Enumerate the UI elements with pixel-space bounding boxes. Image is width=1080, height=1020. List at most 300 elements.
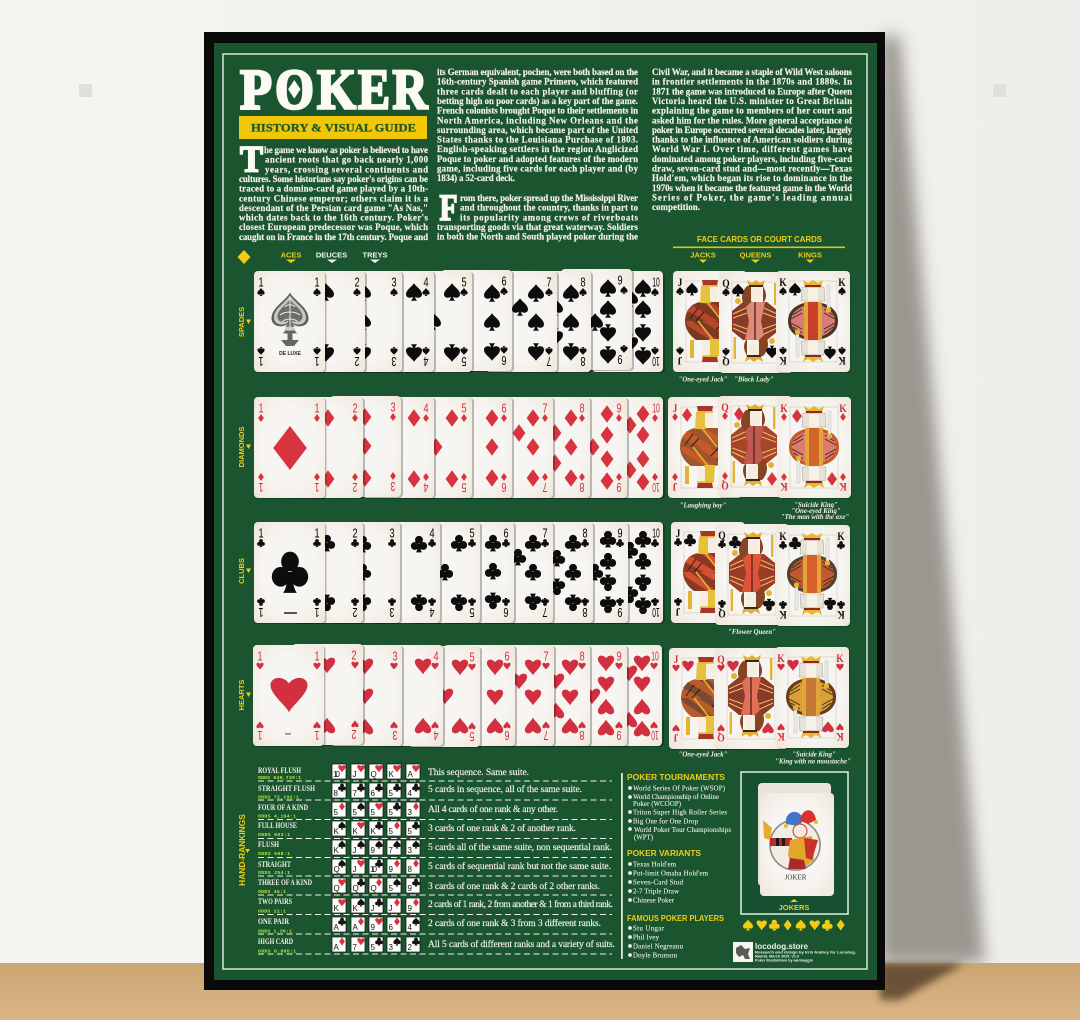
card: five of clubs xyxy=(409,522,482,624)
hand: one pair cards: 6 xyxy=(388,923,394,932)
history text column 3: dominated among poker players, including five-card xyxy=(652,154,852,164)
hand odds: ODDS 1.36:1 xyxy=(258,928,292,934)
history text column 2: 1834) a 52-card deck. xyxy=(437,173,515,183)
card: queen of spades xyxy=(719,272,794,374)
hand: straight cards: J xyxy=(352,865,356,874)
card: king of diamonds xyxy=(777,397,852,499)
card: three of hearts: 3 xyxy=(392,728,398,741)
face cards: diamonds xyxy=(668,396,852,499)
card: three of spades: 3 xyxy=(391,354,397,367)
card: eight of hearts xyxy=(519,645,592,747)
credits: Poker illustrations by warmaggin xyxy=(755,958,813,962)
hand: two pairs cards xyxy=(332,898,420,913)
credits: locodog.store xyxy=(755,941,808,951)
card: eight of spades: 8 xyxy=(580,354,586,367)
hand descriptions: All 5 cards of different ranks and a variety of suits. xyxy=(428,939,615,950)
watermark right xyxy=(993,84,1006,97)
card: three of clubs xyxy=(329,522,402,624)
hand: three of a kind cards: Q xyxy=(334,884,340,893)
card: king of clubs: K xyxy=(837,530,845,543)
row label: diamonds: DIAMONDS xyxy=(237,427,246,467)
card: four of diamonds xyxy=(363,397,436,499)
history text column 3: explaining the game to members of her court and xyxy=(652,106,852,116)
hand: full house cards: K xyxy=(370,827,376,836)
card: five of spades: 5 xyxy=(461,276,467,290)
card: king of spades: K xyxy=(779,276,787,289)
card: king of spades xyxy=(776,271,851,373)
card: ten of hearts: 10 xyxy=(651,727,659,741)
card: ace of spades: 1 xyxy=(258,354,264,367)
card: ace of clubs: 1 xyxy=(258,527,264,541)
hand descriptions: 5 cards all of the same suite, non sequential rank. xyxy=(428,842,612,853)
card: king of clubs xyxy=(776,525,851,627)
card: jack of spades: J xyxy=(677,354,682,367)
row: spades number cards xyxy=(254,269,665,373)
hand names: ONE PAIR xyxy=(258,917,289,926)
row label: spades: SPADES xyxy=(237,307,246,337)
panel: poker tournaments: (WPT) xyxy=(634,834,653,842)
card: two of clubs xyxy=(292,522,365,624)
history text column 3: competition. xyxy=(652,202,700,212)
hand descriptions: 2 cards of 1 rank, 2 from another & 1 from a third rank. xyxy=(428,899,613,910)
card: seven of spades: 7 xyxy=(546,354,552,367)
card: ten of hearts: 10 xyxy=(651,650,659,664)
card: king of diamonds: K xyxy=(780,480,788,493)
hand names: TWO PAIRS xyxy=(258,897,292,906)
row label: clubs xyxy=(237,558,251,584)
card: queen of spades: Q xyxy=(722,355,730,368)
card: six of clubs xyxy=(443,522,516,624)
card: five of spades: 5 xyxy=(461,354,467,367)
wooden floor xyxy=(0,963,1080,1020)
hand: royal flush cards xyxy=(332,764,420,779)
history text column 3: Hold'em, which began its rise to dominance in the xyxy=(652,173,852,183)
caption: king of hearts nicknames xyxy=(775,752,851,766)
caption: king of hearts nicknames: "King with no moustache" xyxy=(775,758,851,766)
card: six of diamonds: 6 xyxy=(501,402,507,416)
card: queen of clubs xyxy=(715,524,790,626)
card: three of diamonds: 3 xyxy=(390,479,396,492)
hand: straight flush cards: 6 xyxy=(370,789,376,798)
hand: two pairs cards: J xyxy=(370,904,374,913)
card: ace of diamonds: 1 xyxy=(258,480,264,493)
history text column 2: French colonists brought Poque to their settlements in xyxy=(437,106,638,116)
title: P xyxy=(240,58,272,122)
card: six of hearts xyxy=(444,645,517,747)
hand: full house cards: K xyxy=(352,827,358,836)
card: jack of clubs: J xyxy=(676,527,681,540)
hand: straight cards: 8 xyxy=(408,865,412,874)
history text column 1 xyxy=(239,145,429,242)
card: jack of spades: J xyxy=(678,276,683,289)
card: four of hearts: 4 xyxy=(433,728,439,741)
hand: four of a kind cards: 5 xyxy=(388,808,394,817)
card: nine of clubs: 9 xyxy=(617,605,623,618)
panel: poker variants: Pot-limit Omaha Hold'em xyxy=(633,870,709,878)
row: diamonds number cards xyxy=(254,396,665,499)
card: king of hearts: K xyxy=(777,730,785,743)
card: four of diamonds: 4 xyxy=(423,402,429,416)
hand: one pair cards: A xyxy=(352,923,358,932)
hand: high card cards: 5 xyxy=(370,943,376,952)
card: eight of diamonds: 8 xyxy=(579,402,585,416)
card: eight of hearts: 8 xyxy=(579,650,585,664)
row: clubs number cards xyxy=(254,522,665,624)
card: ace of diamonds: 1 xyxy=(314,480,320,493)
card: ace of diamonds: 1 xyxy=(314,402,320,416)
card: five of diamonds: 5 xyxy=(461,402,467,416)
column heading: deuces: DEUCES xyxy=(316,250,347,260)
poster inner border xyxy=(223,54,867,969)
card: jack of diamonds xyxy=(668,397,743,499)
history text column 2: rom there, poker spread up the Mississippi River xyxy=(460,193,638,203)
card: ten of spades: 10 xyxy=(652,353,660,367)
card: queen of clubs: Q xyxy=(718,529,726,542)
panel: poker tournaments: World Series Of Poker (WSOP) xyxy=(633,786,725,792)
logo mark xyxy=(733,942,753,962)
hand: straight flush cards: 8 xyxy=(334,789,338,798)
hand: four of a kind cards: 5 xyxy=(334,808,338,817)
card: jack of hearts xyxy=(669,648,744,750)
card: ace of clubs xyxy=(254,522,326,624)
history text column 1: traced to a domino-card game played by a 10th- xyxy=(239,184,428,194)
card: ace of diamonds: 1 xyxy=(258,402,264,416)
icon: joker figure xyxy=(763,810,820,870)
card: eight of clubs: 8 xyxy=(582,527,588,541)
card: ace of spades: 1 xyxy=(314,276,320,290)
card: four of spades xyxy=(363,271,436,373)
drop cap F: F xyxy=(440,188,458,229)
column heading: aces: ACES xyxy=(281,250,301,260)
panel: famous poker players xyxy=(627,913,724,960)
panel: poker variants: Chinese Poker xyxy=(633,898,675,904)
card: queen of hearts: Q xyxy=(717,731,725,744)
card: five of hearts xyxy=(409,646,482,748)
card: six of hearts: 6 xyxy=(504,650,510,664)
card: five of hearts: 5 xyxy=(469,729,475,742)
history text column 3: 1871 the game was introduced to Europe after Queen xyxy=(652,86,852,96)
hand odds: ODDS 21:1 xyxy=(258,908,286,914)
card: three of diamonds xyxy=(330,396,403,498)
card: nine of spades: 9 xyxy=(617,274,623,288)
card: king of diamonds: K xyxy=(839,480,847,493)
card: queen of diamonds: Q xyxy=(721,479,729,492)
hand: flush cards: 7 xyxy=(388,846,394,855)
card: ten of clubs: 10 xyxy=(652,527,660,541)
card: king of clubs: K xyxy=(779,530,787,543)
history text column 2: English-speaking settlers in the region Anglicized xyxy=(437,144,638,154)
card: two of hearts: 2 xyxy=(351,649,357,663)
card: jack of spades xyxy=(673,271,748,373)
card: king of spades: K xyxy=(838,354,846,367)
card: jack of diamonds: J xyxy=(672,480,677,493)
caption: one-eyed jack (hearts): "One-eyed Jack" xyxy=(679,752,728,758)
hand odds xyxy=(258,775,301,954)
history text column 1: he game we know as poker is believed to have xyxy=(264,145,428,155)
card: five of clubs: 5 xyxy=(469,527,475,541)
hand: straight cards xyxy=(332,859,420,874)
hand: high card cards: 2 xyxy=(408,943,412,952)
history text column 1: century Chinese emperor; others claim it is a xyxy=(239,193,429,203)
card: ten of spades xyxy=(592,271,665,373)
heading: hand rankings: HAND-RANKINGS xyxy=(237,814,247,886)
hand: full house cards: 5 xyxy=(388,827,394,836)
card: seven of hearts: 7 xyxy=(543,728,549,741)
card: three of clubs: 3 xyxy=(389,605,395,618)
history text column 1: descendant of the Persian card game "As Nas," xyxy=(239,203,428,213)
row label: spades xyxy=(237,307,251,337)
hand: straight flush cards: 4 xyxy=(408,789,412,798)
hand descriptions: 3 cards of one rank & 2 cards of 2 other ranks. xyxy=(428,881,600,892)
hand: flush cards: J xyxy=(352,846,356,855)
hand names: FULL HOUSE xyxy=(258,821,297,830)
card: seven of spades xyxy=(486,271,559,373)
history text column 2: its popularity among crews of riverboats xyxy=(460,212,639,222)
hand descriptions xyxy=(428,767,615,950)
card: ace of spades: DE LUXE xyxy=(279,351,301,357)
hand descriptions: All 4 cards of one rank & any other. xyxy=(428,804,558,815)
hand: straight cards: Q xyxy=(334,865,340,874)
card: jack of clubs: J xyxy=(675,605,680,618)
hand names xyxy=(258,766,316,946)
card: six of diamonds xyxy=(441,397,514,499)
card: nine of diamonds xyxy=(556,397,629,499)
card: king of hearts xyxy=(775,647,850,749)
panel: famous poker players: Doyle Brunson xyxy=(633,952,678,960)
card: ace of spades: 1 xyxy=(314,354,320,367)
hand: one pair cards: 9 xyxy=(370,923,376,932)
card: four of diamonds: 4 xyxy=(423,480,429,493)
hand odds: ODDS 0.995:1 xyxy=(258,948,296,954)
panel: jokers: JOKERS xyxy=(779,903,809,912)
panel: poker tournaments: World Poker Tour Championships xyxy=(634,827,731,834)
heading: face cards: FACE CARDS OR COURT CARDS xyxy=(697,234,822,244)
hand names: ROYAL FLUSH xyxy=(258,766,302,775)
card: five of hearts: 5 xyxy=(469,651,475,665)
panel: poker tournaments: Poker (WCOOP) xyxy=(633,801,681,808)
caption: laughing boy: "Laughing boy" xyxy=(680,502,727,510)
history text column 3 xyxy=(652,67,853,212)
card: five of diamonds: 5 xyxy=(461,480,467,493)
hand: three of a kind cards: Q xyxy=(352,884,359,893)
card: two of clubs: 2 xyxy=(352,527,358,541)
panel: poker variants: 2-7 Triple Draw xyxy=(633,888,679,896)
history text column 2 xyxy=(437,67,639,242)
card: seven of hearts xyxy=(483,645,556,747)
card: four of clubs: 4 xyxy=(429,527,435,541)
card: five of diamonds xyxy=(401,397,474,499)
subtitle banner: HISTORY & VISUAL GUIDE xyxy=(251,120,416,134)
card: ace of spades: 1 xyxy=(258,276,264,290)
panel: poker variants: Seven-Card Stud xyxy=(633,880,684,886)
card: six of clubs: 6 xyxy=(503,527,509,541)
hand: full house cards: K xyxy=(334,827,340,836)
face cards: hearts xyxy=(669,647,850,750)
card: nine of spades: 9 xyxy=(617,352,623,365)
card: ace of clubs: 1 xyxy=(314,527,320,541)
history text column 3: Series of Poker, the game's leading annual xyxy=(652,192,853,202)
card: nine of spades xyxy=(561,269,634,371)
icon row: yellow suits xyxy=(743,920,845,930)
card: ten of diamonds: 10 xyxy=(652,402,660,416)
card: king of hearts: K xyxy=(836,730,844,743)
card: three of hearts: 3 xyxy=(392,650,398,664)
card: ten of diamonds: 10 xyxy=(652,479,660,493)
card: three of diamonds: 3 xyxy=(390,401,396,415)
card: king of hearts: K xyxy=(777,652,785,665)
card: king of diamonds: K xyxy=(780,402,788,415)
card: seven of diamonds: 7 xyxy=(542,402,548,416)
card: six of diamonds: 6 xyxy=(501,480,507,493)
card: two of clubs: 2 xyxy=(352,605,358,618)
card: eight of clubs: 8 xyxy=(582,605,588,618)
card: queen of hearts xyxy=(714,648,789,750)
hand: one pair cards: A xyxy=(334,923,340,932)
caption: black lady: "Black Lady" xyxy=(734,376,774,384)
panel: jokers xyxy=(741,772,848,914)
card: ace of spades xyxy=(254,271,326,373)
card: queen of diamonds xyxy=(718,396,793,498)
card: two of spades xyxy=(294,271,367,373)
hand: four of a kind cards: 3 xyxy=(408,808,412,817)
hand: three of a kind cards: 5 xyxy=(388,884,394,893)
card: six of clubs: 6 xyxy=(503,605,509,618)
history text column 3: asked him for the rules. More general acceptance of xyxy=(652,115,853,125)
card: two of hearts: 2 xyxy=(351,727,357,740)
hand descriptions: This sequence. Same suite. xyxy=(428,767,529,778)
history text column 2: States thanks to the Louisiana Purchase of 1803. xyxy=(437,135,638,145)
history text column 1: cultures. Some historians say poker's origins can be xyxy=(239,174,428,184)
card: ace of clubs: 1 xyxy=(314,605,320,618)
card: seven of diamonds xyxy=(482,397,555,499)
row: hearts number cards xyxy=(253,644,664,748)
card: nine of hearts: 9 xyxy=(616,728,622,741)
card: seven of spades: 7 xyxy=(546,276,552,290)
hand: royal flush cards: Q xyxy=(370,770,377,779)
history text column 1: which dates back to the 16th century. Poker's xyxy=(239,213,429,223)
card: five of clubs: 5 xyxy=(469,605,475,618)
hand names: HIGH CARD xyxy=(258,937,293,946)
card: eight of spades: 8 xyxy=(580,276,586,290)
card: jack of clubs xyxy=(671,522,746,624)
card: six of spades: 6 xyxy=(501,353,507,366)
card: seven of clubs xyxy=(482,522,555,624)
history text column 1: closest European predecessor was Poque, which xyxy=(239,222,428,232)
hand: full house cards: 5 xyxy=(408,827,412,836)
hand names: FOUR OF A KIND xyxy=(258,803,308,812)
card: eight of clubs xyxy=(522,522,595,624)
card: king of spades: K xyxy=(779,354,787,367)
card: six of spades xyxy=(441,270,514,372)
hand names: THREE OF A KIND xyxy=(258,878,312,887)
history text column 2: three cards dealt to each player and bluffing (or xyxy=(437,86,638,96)
panel: poker variants xyxy=(627,848,709,904)
poster shadow on floor xyxy=(880,963,965,1000)
card: nine of clubs xyxy=(557,522,630,624)
card: four of clubs xyxy=(369,522,442,624)
history text column 3: 1970s when it became the featured game in the World xyxy=(652,183,852,193)
panel: famous poker players: FAMOUS POKER PLAYERS xyxy=(627,913,724,923)
card: five of spades xyxy=(401,271,474,373)
card: eight of spades xyxy=(520,271,593,373)
poster shadow on wall xyxy=(880,36,985,963)
hand odds: ODDS 46:1 xyxy=(258,889,286,895)
hand: one pair cards: 4 xyxy=(408,923,412,932)
repaint floor edge xyxy=(880,963,1080,1020)
panel: famous poker players: Daniel Negreanu xyxy=(633,944,684,950)
card: ace of hearts: 1 xyxy=(314,728,320,741)
hand descriptions: 3 cards of one rank & 2 of another rank. xyxy=(428,823,576,834)
history text column 2: transporting goods via that great waterway. Soldiers xyxy=(437,222,639,232)
history text column 3: thanks to the influence of American soldiers during xyxy=(652,135,853,145)
card: seven of hearts: 7 xyxy=(543,650,549,664)
history text column 3: draw, seven-card stud and—most recently—Texas xyxy=(652,164,853,174)
hand: straight flush cards xyxy=(332,783,420,798)
card: four of spades: 4 xyxy=(423,276,429,290)
history text column 3: World War I. Over time, different games have xyxy=(652,144,852,154)
watermark left xyxy=(79,84,92,97)
hand names: STRAIGHT FLUSH xyxy=(258,784,316,793)
history text column 2: in both the North and South played poker during the xyxy=(437,232,638,242)
history text column 2: game, including five cards for each player and (by xyxy=(437,164,639,174)
column heading: treys: TREYS xyxy=(362,250,388,260)
hand names: FLUSH xyxy=(258,840,280,849)
hand odds: ODDS 508:1 xyxy=(258,851,290,857)
hand: straight flush cards: 5 xyxy=(388,789,394,798)
history text column 3: poker in Europe occurred several decades later, largely xyxy=(652,125,853,135)
panel: famous poker players: Phil Ivey xyxy=(633,934,660,942)
hand: high card cards: A xyxy=(334,943,340,952)
hand: three of a kind cards: 9 xyxy=(408,884,412,893)
row label: hearts xyxy=(237,680,251,710)
hand: high card cards: 7 xyxy=(352,943,358,952)
panel: poker tournaments xyxy=(627,772,731,842)
card: four of clubs: 4 xyxy=(429,605,435,618)
caption: king of diamonds nicknames: "The man with the axe" xyxy=(781,514,849,521)
panel: poker tournaments: World Championship of Online xyxy=(633,794,719,801)
card: ten of clubs: 10 xyxy=(652,604,660,618)
drop cap T: T xyxy=(240,140,263,180)
column heading: queens: QUEENS xyxy=(740,250,771,260)
row label: clubs: CLUBS xyxy=(237,558,246,584)
card: two of hearts xyxy=(292,644,365,746)
panel: poker tournaments: Big One for One Drop xyxy=(633,818,699,826)
hand: four of a kind cards: 5 xyxy=(352,808,358,817)
history text column 2: Poque to poker and adopted features of the modern xyxy=(437,154,638,164)
history text column 2: and throughout the country, thanks in part to xyxy=(460,203,639,213)
row label: hearts: HEARTS xyxy=(237,680,246,710)
history text column 2: North America, including New Orleans and the xyxy=(437,115,638,125)
card: four of spades: 4 xyxy=(423,354,429,367)
hand: straight flush cards: 7 xyxy=(352,789,358,798)
hand: straight cards: 9 xyxy=(388,865,394,874)
title: E xyxy=(358,58,390,122)
card: eight of diamonds xyxy=(519,397,592,499)
credits xyxy=(755,941,856,962)
hand: high card cards xyxy=(332,937,420,952)
card: two of spades: 2 xyxy=(354,276,360,290)
card: eight of diamonds: 8 xyxy=(579,480,585,493)
card: two of diamonds: 2 xyxy=(352,402,358,416)
caption: king of diamonds nicknames xyxy=(781,502,849,521)
hand descriptions: 2 cards of one rank & 3 from 3 different ranks. xyxy=(428,918,601,929)
panel: poker tournaments: Triton Super High Roller Series xyxy=(633,810,727,816)
card: ten of clubs xyxy=(592,522,665,624)
card: three of clubs: 3 xyxy=(389,527,395,541)
history text column 1: caught on in France in the 17th century. Poque and xyxy=(239,232,428,242)
hand: one pair cards xyxy=(332,917,420,932)
card: ace of hearts: 1 xyxy=(257,728,263,741)
